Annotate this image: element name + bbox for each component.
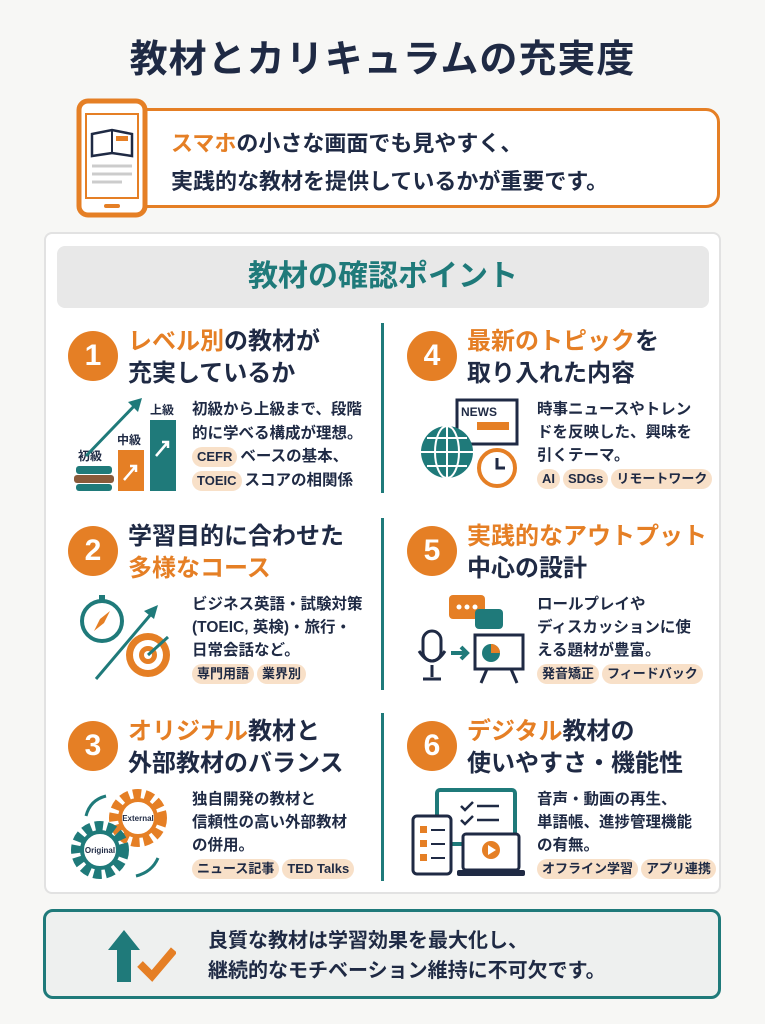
section 3: の併用。	[192, 837, 254, 854]
conclusion text: 継続的なモチベーション維持に不可欠です。	[208, 960, 606, 982]
conclusion text	[208, 930, 606, 982]
section 5: 5	[424, 534, 440, 567]
icon: mic speech presentation	[418, 595, 524, 684]
panel header: 教材の確認ポイント	[248, 260, 518, 293]
section 6: 使いやすさ・機能性	[467, 750, 683, 777]
section 2	[68, 523, 363, 684]
section 3	[68, 718, 354, 879]
section 1: レベル別の教材が	[128, 328, 320, 355]
main panel	[44, 232, 721, 894]
section 4: 最新のトピックを	[467, 328, 659, 355]
section 6: デジタル教材の	[467, 718, 635, 745]
section 3: 信頼性の高い外部教材	[192, 814, 347, 831]
icon: smartphone	[76, 98, 148, 218]
section 6: 単語帳、進捗管理機能	[537, 814, 692, 831]
section 3: 外部教材のバランス	[128, 750, 344, 777]
section 5: 実践的なアウトプット	[467, 523, 707, 550]
icon: devices	[412, 788, 525, 876]
section 4: AI	[542, 471, 555, 486]
icon: up arrow and check	[108, 930, 176, 982]
icon: compass and target	[80, 595, 170, 680]
section 3: 独自開発の教材と	[192, 791, 316, 808]
section 4: SDGs	[568, 471, 603, 486]
section 1: 1	[85, 339, 101, 372]
intro text: 実践的な教材を提供しているかが重要です。	[171, 169, 608, 194]
panel header	[57, 246, 709, 308]
section 4: リモートワーク	[616, 471, 707, 486]
icon: gears: External	[122, 814, 154, 823]
section 2: 日常会話など。	[192, 642, 300, 659]
icon: news globe clock: NEWS	[461, 405, 497, 419]
section 1: 初級から上級まで、段階	[192, 401, 362, 418]
section 3: ニュース記事	[197, 861, 274, 876]
conclusion box	[43, 909, 721, 999]
icon: level bars: 中級	[117, 432, 141, 447]
section 5: ロールプレイや	[537, 596, 646, 613]
section 6: アプリ連携	[646, 861, 711, 876]
section 3: TED Talks	[287, 861, 349, 876]
section 6: の有無。	[537, 837, 599, 854]
section 1: 的に学べる構成が理想。	[192, 425, 363, 442]
section 4: 4	[424, 339, 440, 372]
section 4: 取り入れた内容	[467, 360, 635, 387]
section 5	[407, 523, 707, 684]
section 4: 引くテーマ。	[537, 447, 630, 464]
section 1: 充実しているか	[128, 360, 295, 387]
icon: gears	[71, 789, 167, 879]
intro box	[100, 108, 720, 208]
section 2: (TOEIC, 英検)・旅行・	[192, 619, 351, 636]
section 6: 音声・動画の再生、	[537, 791, 677, 808]
section 6: 6	[424, 729, 440, 762]
section 1: CEFR	[197, 449, 232, 464]
section 2: 2	[85, 534, 101, 567]
section 5: フィードバック	[607, 666, 698, 681]
section 5: 発音矯正	[542, 666, 594, 681]
title: 教材とカリキュラムの充実度	[130, 39, 635, 81]
section 6	[407, 718, 716, 879]
section 6: オフライン学習	[542, 861, 633, 876]
section 1	[68, 328, 363, 491]
icon: news globe clock	[421, 398, 518, 488]
section 3: 3	[85, 729, 101, 762]
section 5: ディスカッションに使	[537, 619, 691, 636]
icon: level bars	[74, 398, 176, 491]
section 2: 専門用語	[197, 666, 249, 681]
section 4: 時事ニュースやトレン	[537, 401, 691, 418]
section 2: 多様なコース	[128, 555, 271, 582]
section 1: ベースの基本、	[240, 448, 348, 465]
icon: level bars: 初級	[78, 448, 102, 463]
section 2: ビジネス英語・試験対策	[192, 596, 363, 613]
section 4	[407, 328, 712, 489]
section 1: TOEIC	[197, 473, 236, 488]
icon: level bars: 上級	[150, 402, 174, 417]
section 5: 中心の設計	[467, 555, 587, 582]
intro text: スマホの小さな画面でも見やすく、	[171, 131, 522, 156]
section 2: 学習目的に合わせた	[128, 523, 344, 550]
section 1: スコアの相関係	[244, 472, 353, 489]
section 4: ドを反映した、興味を	[537, 424, 692, 441]
conclusion text: 良質な教材は学習効果を最大化し、	[208, 930, 528, 952]
intro text	[171, 131, 608, 194]
section 5: える題材が豊富。	[537, 642, 661, 659]
section 3: オリジナル教材と	[128, 718, 320, 745]
icon: gears: Original	[85, 846, 115, 855]
section 2: 業界別	[262, 666, 301, 681]
